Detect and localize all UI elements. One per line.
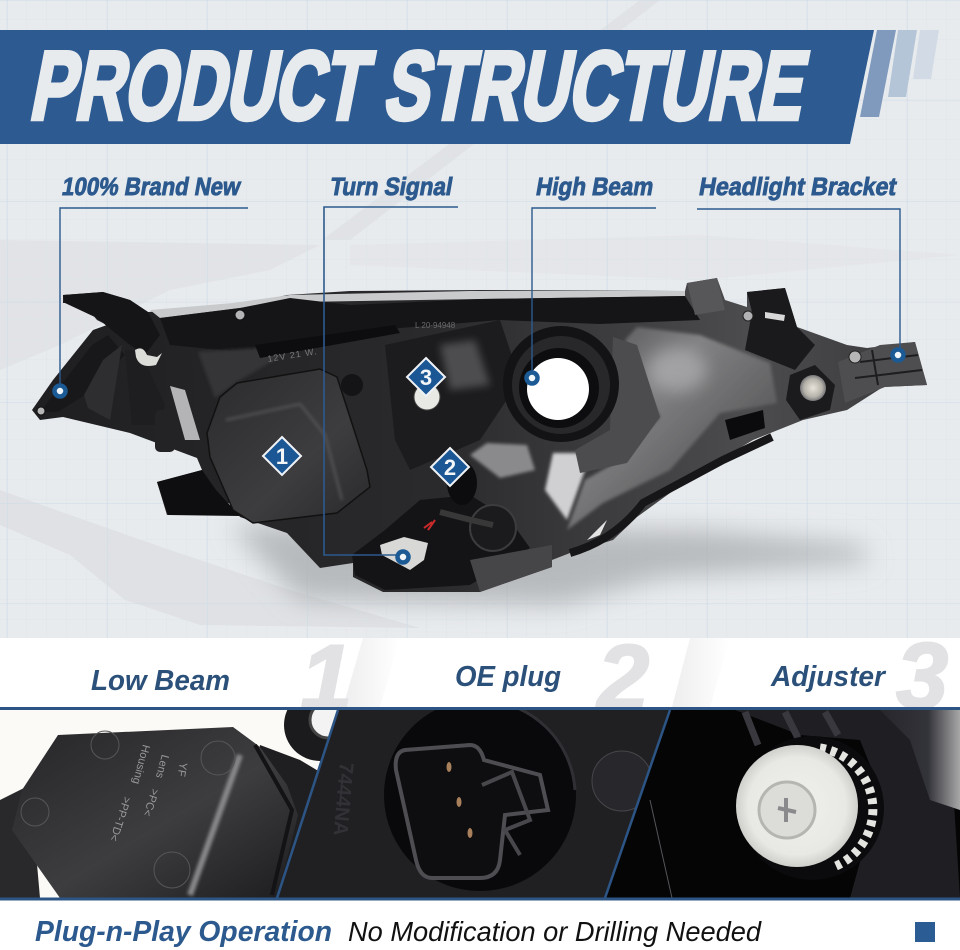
lower body band [570, 437, 772, 553]
diamond 3: 3 [420, 365, 432, 390]
knob on top of cover [341, 374, 363, 396]
moulded text: Housing: Housing [130, 743, 152, 785]
low beam cover [207, 369, 370, 523]
heading: OE plug: OE plug [455, 661, 561, 693]
footer: Plug-n-Play Operation: Plug-n-Play Operation [35, 916, 332, 948]
diamond 1: 1 [276, 444, 288, 469]
ball stud [800, 375, 826, 401]
footer square [915, 922, 935, 942]
diamond 1 [263, 437, 301, 475]
label: 100% Brand New: 100% Brand New [60, 173, 243, 201]
leader lines [60, 207, 900, 555]
detail photo 2: OE plug [278, 710, 669, 898]
footer: No Modification or Drilling Needed: No Modification or Drilling Needed [348, 916, 763, 947]
plug body [396, 745, 548, 878]
slanted band 2 [672, 638, 704, 707]
ring behind cover [284, 710, 328, 761]
cover plate [12, 727, 298, 898]
center ribbed section [385, 320, 520, 470]
adjuster screw head [759, 782, 815, 838]
diamond 3 [407, 358, 445, 396]
headlight assembly [32, 278, 927, 592]
right mount bracket [687, 278, 725, 315]
high beam lens ring [503, 326, 619, 442]
moulded text on cover [107, 743, 189, 842]
detail photo 1: low beam cover [0, 710, 336, 898]
diamond 2: 2 [444, 455, 456, 480]
top rim [160, 296, 700, 352]
slanted band 1 [346, 638, 374, 707]
upper ribs and housing [735, 710, 960, 898]
bulb rod with embossed text [255, 325, 400, 358]
headlight housing silhouette [32, 278, 927, 592]
phillips recess [778, 798, 796, 822]
adjuster gear [414, 384, 440, 410]
heading: Low Beam: Low Beam [91, 665, 230, 697]
socket disc [384, 699, 576, 891]
mounting arm [63, 292, 160, 355]
embossed wattage text: 12V 21 W. [267, 346, 318, 364]
label: High Beam: High Beam [534, 173, 656, 201]
banner accent stripes [860, 30, 939, 117]
numbered diamond markers [263, 358, 469, 486]
clear lens sliver [587, 520, 607, 540]
moulded text: YF: YF [175, 761, 189, 778]
wiring connector [380, 520, 435, 570]
background: blueprint grid paper [0, 0, 960, 638]
moulded circle [592, 751, 652, 811]
diamond 2 [431, 448, 469, 486]
footer [0, 901, 960, 950]
high beam lens opening [527, 358, 589, 420]
cover ridge [226, 404, 342, 500]
faint engraved code: 7444NA [329, 762, 357, 837]
plug pins [446, 762, 472, 838]
callout labels [60, 173, 899, 201]
ghost numeral 1: 1 [300, 625, 352, 730]
upper body blocks [198, 345, 300, 398]
white clip [135, 348, 162, 366]
moulded text: Lens: Lens [153, 753, 171, 780]
left triangle frame [40, 335, 125, 412]
moulded line [650, 800, 672, 898]
mounting screw [235, 310, 245, 320]
embossed part code: L 20-94948 [415, 321, 456, 330]
adjuster wheel [736, 745, 858, 867]
plug socket [447, 461, 477, 505]
right wing body [567, 327, 777, 530]
gear recess [794, 736, 884, 861]
socket grommet [470, 505, 516, 551]
detail strip heading band [92, 638, 948, 707]
adjuster wheel teeth [820, 748, 873, 866]
label: Turn Signal: Turn Signal [328, 173, 455, 201]
moulded text: PP-TD: >PP-TD< [107, 795, 133, 842]
upper chrome strip [150, 291, 685, 318]
detail photo 3: adjuster [600, 710, 960, 900]
photo divider rules [0, 708, 960, 899]
ghost numeral 2: 2 [595, 625, 649, 730]
lens mid surround [575, 337, 660, 473]
title banner [0, 30, 874, 144]
shadow below headlight [230, 525, 870, 605]
vertical bracket [157, 470, 240, 516]
cover moulding circles [21, 731, 235, 888]
callout dots [54, 350, 904, 562]
plug latch [482, 772, 530, 855]
light wing highlight [647, 348, 707, 392]
ghost numeral 3: 3 [896, 623, 948, 728]
heading: Adjuster: Adjuster [770, 661, 887, 693]
label: Headlight Bracket: Headlight Bracket [697, 173, 899, 201]
moulded text: PC: >PC< [140, 787, 161, 818]
